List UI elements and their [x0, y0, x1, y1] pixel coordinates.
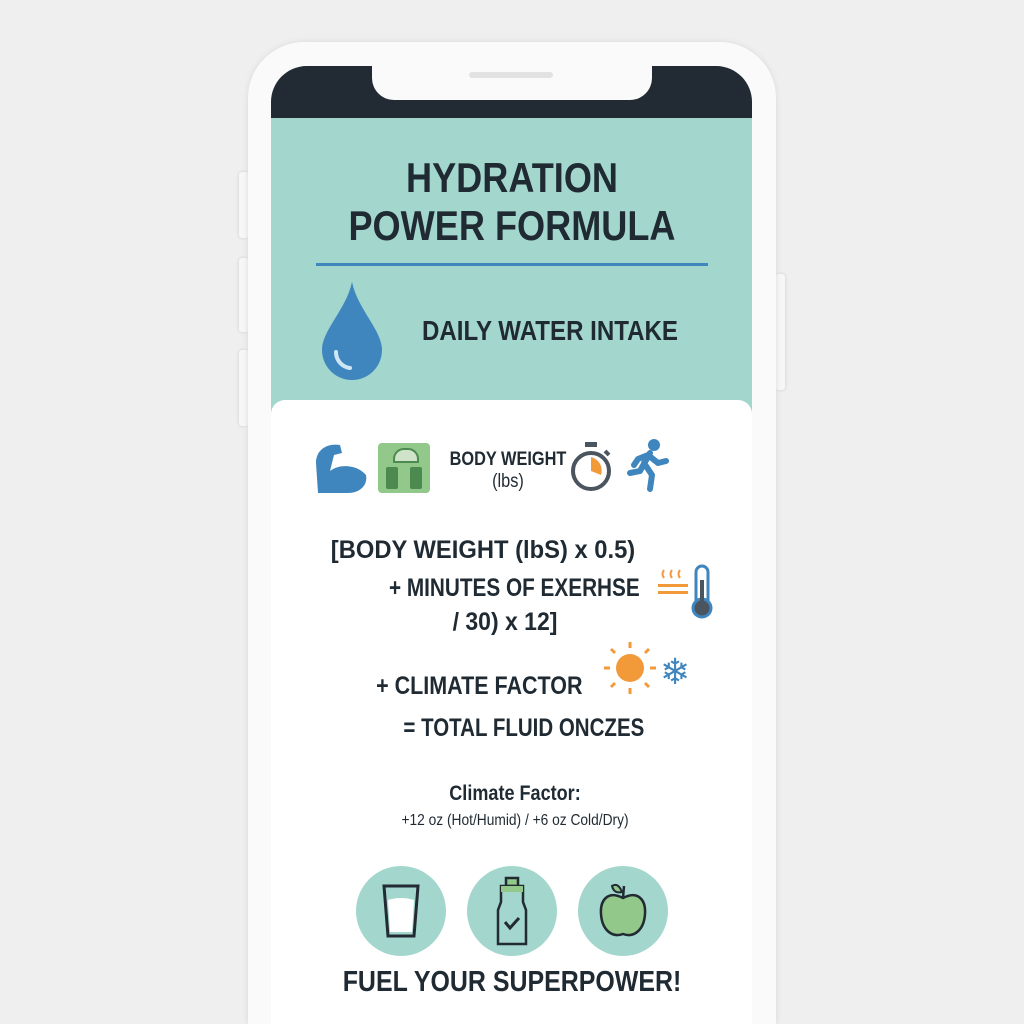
climate factor note: Climate Factor: [449, 782, 581, 805]
formula: + CLIMATE FACTOR [376, 672, 583, 700]
title [348, 154, 676, 249]
icon: sun [604, 642, 656, 694]
formula: / 30) x 12] [453, 608, 557, 636]
formula [331, 536, 712, 742]
climate factor note: +12 oz (Hot/Humid) / +6 oz Cold/Dry) [401, 812, 629, 829]
label: body weight [450, 449, 566, 492]
screen [271, 66, 752, 1024]
icon: heat thermometer [658, 564, 712, 618]
tagline: FUEL YOUR SUPERPOWER! [343, 966, 681, 998]
top dark bar with notch [271, 66, 752, 118]
climate factor note [401, 782, 629, 829]
icon row [316, 439, 669, 493]
icon: runner [627, 439, 669, 492]
icon: glass of water [356, 866, 446, 956]
title: HYDRATION [406, 154, 618, 201]
icon: snowflake: ❄ [660, 651, 690, 692]
subtitle: DAILY WATER INTAKE [422, 315, 678, 346]
phone body [248, 42, 776, 1024]
formula: + MINUTES OF EXERHSE [389, 574, 640, 602]
formula: [BODY WEIGHT (lbS) x 0.5) [331, 536, 635, 564]
title: POWER FORMULA [348, 202, 676, 249]
white card [271, 400, 752, 1024]
label: body weight: BODY WEIGHT [450, 449, 566, 470]
label: body weight: (lbs) [492, 471, 524, 492]
icon: bottle [467, 866, 557, 956]
bottom icons [356, 866, 668, 956]
divider line [316, 263, 708, 266]
icon: stopwatch [571, 442, 611, 491]
icon: scale [378, 443, 430, 493]
icon: flexed arm [316, 444, 366, 493]
icon: water drop [322, 282, 382, 380]
formula: = TOTAL FLUID ONCZES [403, 714, 644, 742]
icon: apple [578, 866, 668, 956]
